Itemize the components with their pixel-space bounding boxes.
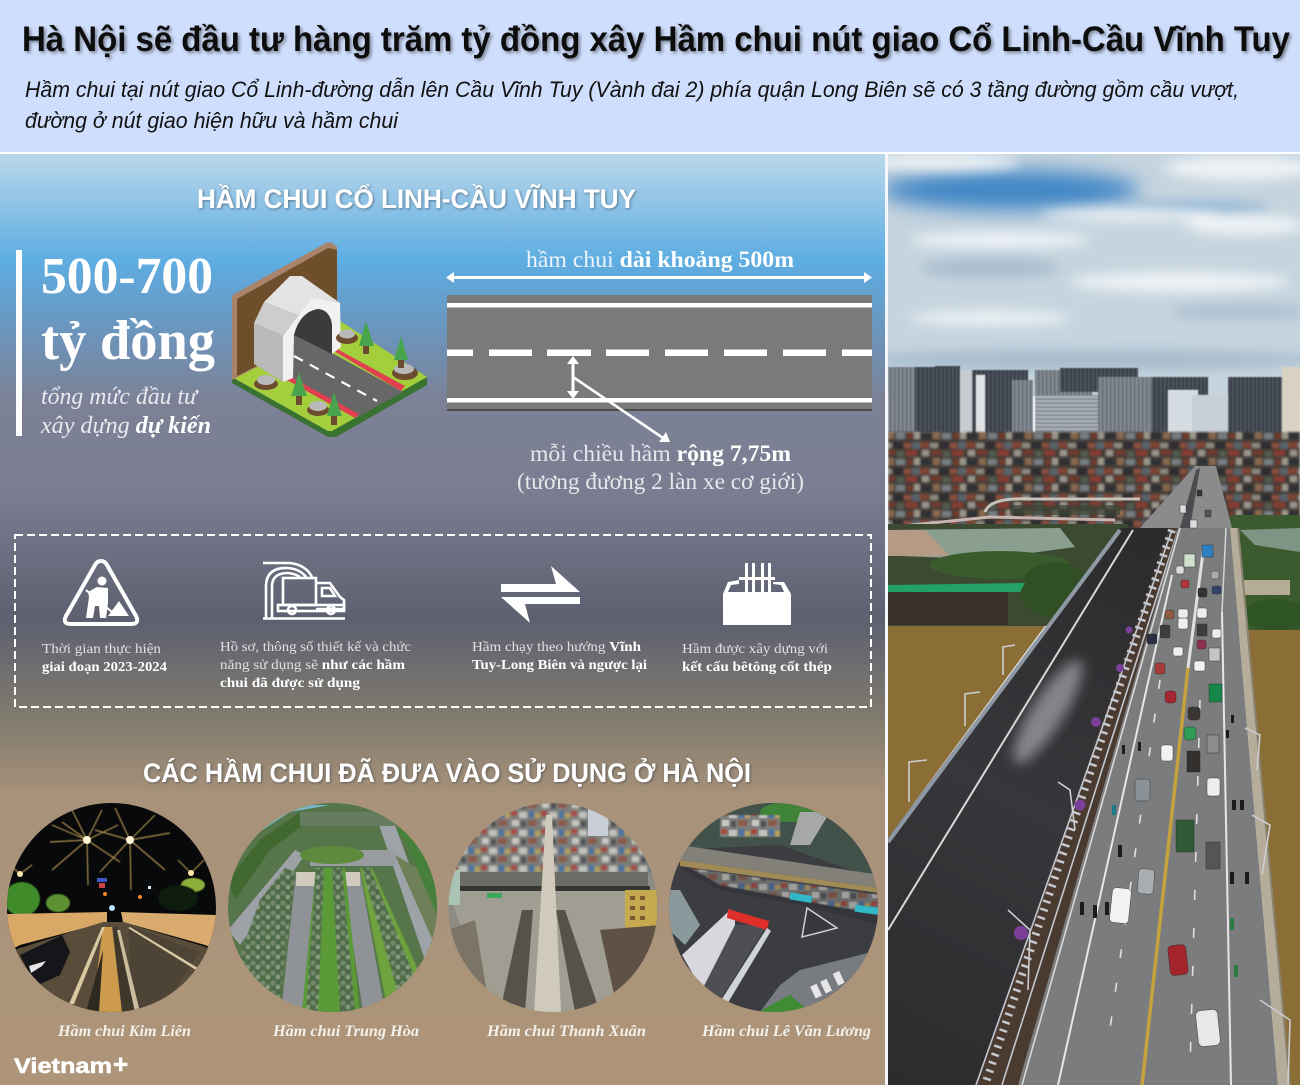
photo circle: Kim Liên underpass — [4, 803, 216, 1012]
text: structure: kết cấu bêtông cốt thép — [682, 660, 832, 675]
text: timeline: giai đoạn 2023-2024 — [42, 660, 167, 675]
divider — [885, 154, 888, 1085]
riverside ground right — [1230, 515, 1300, 631]
icon: worker warning sign — [65, 561, 137, 624]
icon: isometric tunnel — [232, 242, 427, 437]
photo circle: Lê Văn Lương underpass — [669, 802, 880, 1012]
panel: key facts dashed box — [15, 535, 871, 707]
flyover ramps — [907, 497, 1140, 524]
text: design parameters: năng sử dụng sẽ như các hầm — [220, 658, 405, 673]
photo circle: Thanh Xuân underpass — [448, 803, 660, 1012]
heading: existing tunnels: CÁC HẦM CHUI ĐÃ ĐƯA VÀO SỬ DỤNG Ở HÀ NỘI — [143, 756, 751, 788]
road diagram — [447, 295, 872, 442]
text: timeline: Thời gian thực hiện — [42, 642, 161, 657]
logo: Vietnam+ — [14, 1049, 128, 1079]
photo circle: Trung Hòa underpass — [228, 803, 437, 1012]
captions — [57, 1023, 871, 1040]
arrow: tunnel length — [446, 272, 872, 283]
label: lane width: mỗi chiều hầm rộng 7,75m — [530, 441, 791, 466]
captions: Hầm chui Kim Liên — [57, 1023, 191, 1040]
median railing — [976, 528, 1180, 1085]
icon: reinforced concrete — [723, 563, 791, 625]
label: tunnel length: hầm chui dài khoảng 500m — [526, 247, 794, 272]
arrow: lane width — [567, 356, 670, 442]
subtitle: Hầm chui tại nút giao Cổ Linh-đường dẫn lên Cầu Vĩnh Tuy (Vành đai 2) phía quận Long Biên sẽ có 3 tầng đường gồm cầu vượt, — [25, 77, 1239, 102]
left bridge deck — [888, 528, 1170, 1085]
city skyline — [888, 366, 1300, 452]
text: design parameters: chui đã được sử dụng — [220, 676, 360, 691]
text: structure — [682, 642, 832, 675]
subtitle: đường ở nút giao hiện hữu và hầm chui — [25, 108, 399, 133]
captions: Hầm chui Trung Hòa — [272, 1023, 419, 1040]
text: direction: Tuy-Long Biên và ngược lại — [472, 658, 647, 673]
text: direction: Hầm chạy theo hướng Vĩnh — [472, 640, 641, 655]
right bridge road — [1018, 528, 1290, 1085]
sky — [860, 146, 1300, 396]
photo: Vĩnh Tuy bridge — [860, 146, 1300, 1085]
text: structure: Hầm được xây dựng với — [682, 642, 828, 657]
text: design parameters: Hồ sơ, thông số thiết kế và chức — [220, 640, 411, 655]
heading: tunnel section: HẦM CHUI CỔ LINH-CẦU VĨNH TUY — [197, 183, 636, 214]
low-rise houses — [888, 432, 1300, 530]
callout: total investment — [16, 248, 215, 439]
icon: two-way arrows — [501, 566, 580, 623]
river — [888, 626, 1300, 1085]
logo: Vietnam+: Vietnam — [14, 1055, 112, 1078]
text: direction — [472, 640, 647, 673]
label: lane width — [517, 441, 804, 494]
motorbikes — [1080, 715, 1249, 977]
subtitle — [25, 77, 1239, 133]
callout: total investment: 500-700 — [41, 248, 213, 305]
header panel — [0, 0, 1300, 152]
callout: total investment: tổng mức đầu tư — [41, 384, 199, 410]
vehicles — [1109, 490, 1222, 1047]
upper road approach — [1140, 466, 1232, 528]
callout: total investment: xây dựng dự kiến — [40, 413, 211, 439]
captions: Hầm chui Lê Văn Lương — [701, 1023, 871, 1040]
logo: Vietnam+: + — [113, 1049, 128, 1079]
label: lane width: (tương đương 2 làn xe cơ giới) — [517, 469, 804, 494]
text: timeline — [42, 642, 167, 675]
text: design parameters — [220, 640, 411, 691]
street lamps — [909, 645, 1290, 1085]
icon: truck in tunnel — [263, 563, 345, 619]
panel: left infographic — [0, 154, 885, 1085]
callout: total investment: tỷ đồng — [41, 310, 215, 372]
riverside ground left — [888, 524, 1128, 626]
captions: Hầm chui Thanh Xuân — [486, 1023, 646, 1040]
